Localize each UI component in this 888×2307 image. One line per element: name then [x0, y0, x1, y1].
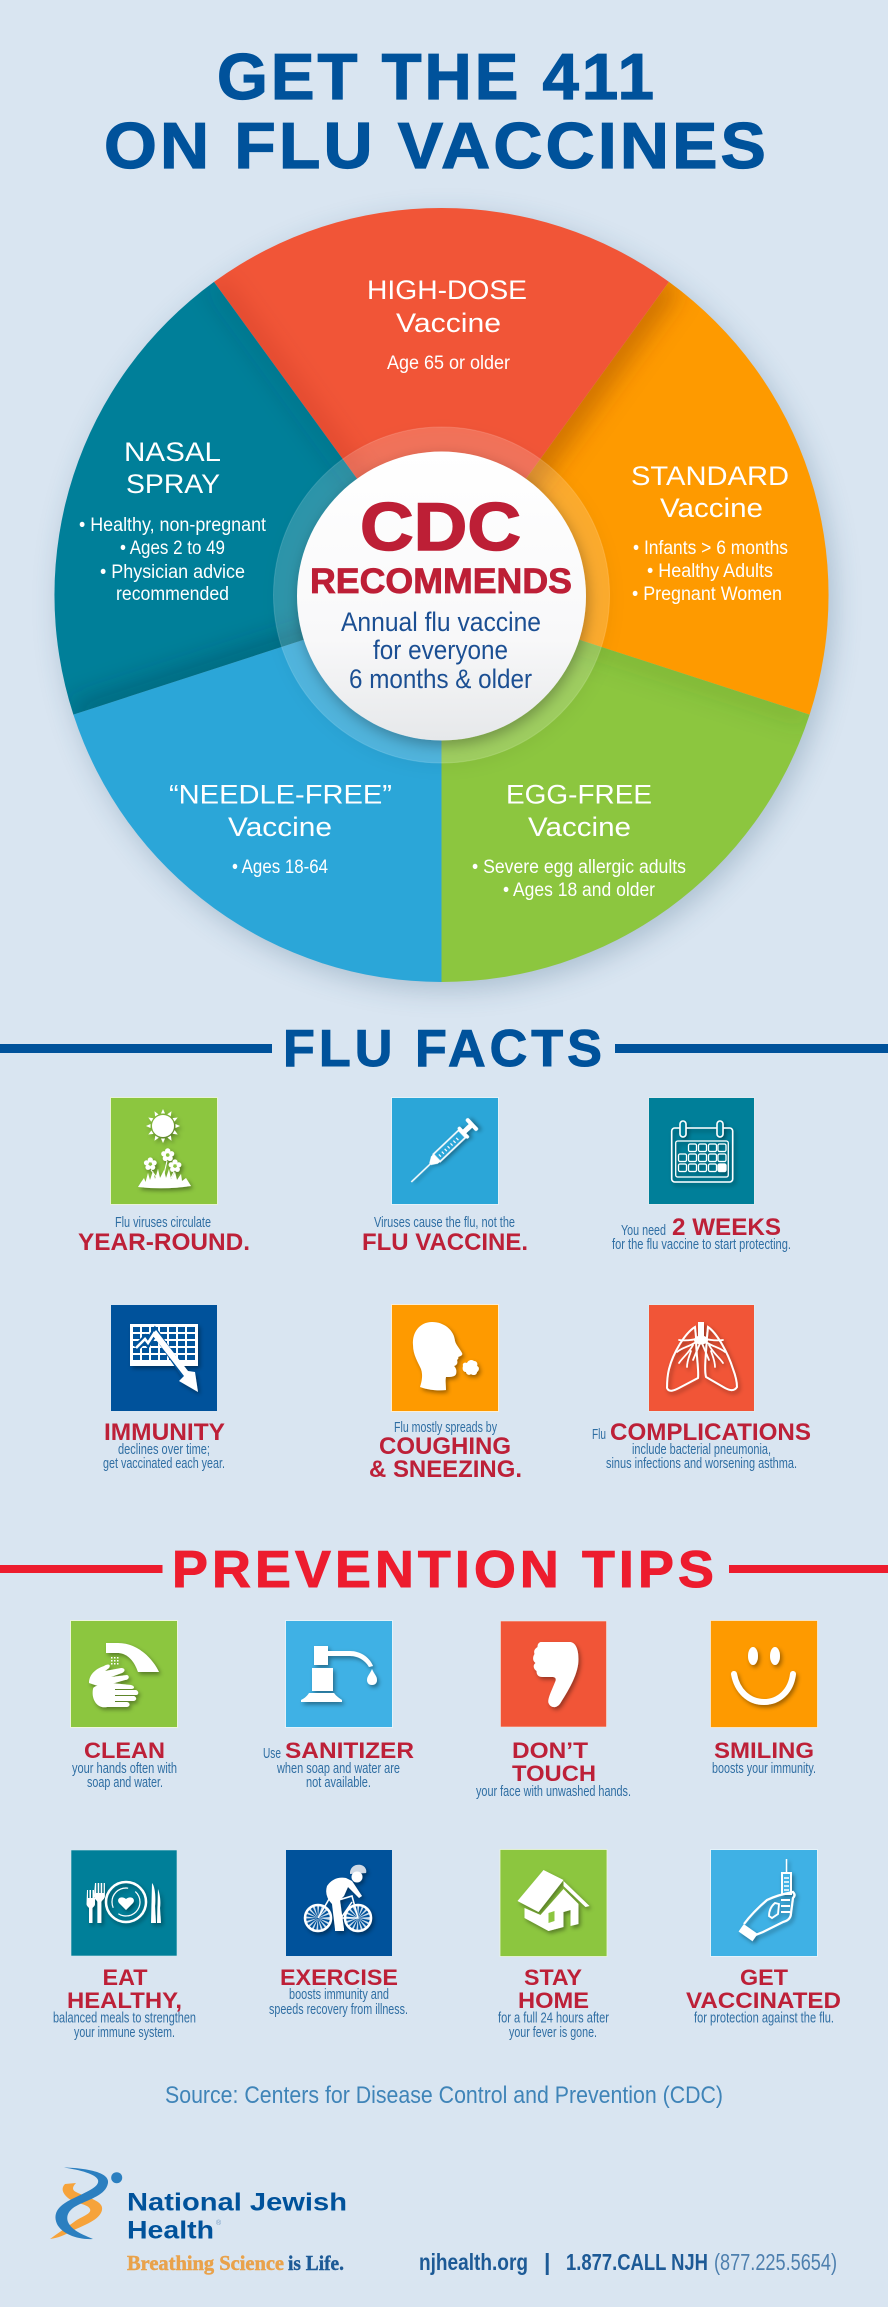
fact text: year-round — [78, 1215, 250, 1256]
segment: nasal spray — [54, 282, 357, 715]
tip text: don't touch: TOUCH — [512, 1761, 596, 1786]
segment: nasal spray: • Ages 2 to 49 — [120, 538, 225, 559]
tip text: clean: CLEAN — [84, 1738, 165, 1763]
heading: prevention tips — [0, 1541, 888, 1599]
tip text: clean: your hands often with — [72, 1761, 177, 1777]
tip text: sanitizer — [263, 1738, 414, 1791]
center circle: CDC recommends: CDC — [360, 489, 521, 565]
icon: sanitizer pump — [286, 1620, 392, 1728]
icon: thumbs down — [500, 1621, 606, 1727]
tip text: stay home: your fever is gone. — [509, 2025, 597, 2041]
icon: hand holding syringe — [710, 1850, 818, 1956]
heading: prevention tips: PREVENTION TIPS — [172, 1541, 718, 1599]
center circle: CDC recommends: RECOMMENDS — [310, 562, 572, 601]
tip text: sanitizer: SANITIZER — [285, 1738, 414, 1763]
tip text: stay home: HOME — [518, 1988, 589, 2013]
segment: nasal spray: SPRAY — [126, 469, 220, 499]
icon: sun and flowers — [110, 1098, 218, 1204]
logo: National Jewish Health: Breathing Science — [127, 2251, 284, 2275]
fact text: immunity: get vaccinated each year. — [103, 1456, 225, 1472]
segment: standard: • Infants > 6 months — [633, 538, 788, 559]
vaccine wheel chart — [54, 208, 834, 990]
fact text: coughing and sneezing: COUGHING — [379, 1433, 511, 1460]
segment: standard: Vaccine — [660, 493, 763, 523]
tip text: smiling: boosts your immunity. — [712, 1761, 816, 1777]
heading: flu facts — [0, 1020, 888, 1078]
center circle: CDC recommends: for everyone — [373, 635, 508, 665]
segment: high-dose: HIGH-DOSE — [367, 275, 527, 305]
tip text: sanitizer: Use — [263, 1746, 281, 1762]
fact text: year-round: Flu viruses circulate — [115, 1215, 211, 1231]
icon: sneezing head — [392, 1304, 498, 1412]
tip text: get vaccinated: GET — [740, 1965, 788, 1990]
fact text: 2 weeks — [612, 1214, 791, 1253]
tip text: eat healthy: EAT — [102, 1965, 148, 1990]
fact text: coughing and sneezing: & SNEEZING. — [369, 1456, 522, 1483]
tip text: smiling: SMILING — [714, 1738, 814, 1763]
logo: National Jewish Health: National Jewish — [127, 2188, 347, 2216]
icon: washing hands — [70, 1620, 178, 1728]
contact line: 1.877.CALL NJH — [566, 2249, 708, 2275]
icon: house — [500, 1850, 607, 1956]
icon: syringe — [392, 1098, 498, 1204]
fact text: complications: COMPLICATIONS — [610, 1419, 811, 1446]
tip text: get vaccinated: for protection against the flu. — [694, 2010, 834, 2026]
tip text: eat healthy: your immune system. — [74, 2025, 175, 2041]
title: GET THE 411 — [217, 40, 657, 113]
icon: declining chart — [111, 1305, 217, 1411]
segment: standard: STANDARD — [631, 461, 789, 491]
segment: nasal spray: NASAL — [124, 437, 221, 467]
tip text: exercise: EXERCISE — [280, 1965, 398, 1990]
title — [104, 40, 769, 182]
contact line: njhealth.org — [419, 2249, 528, 2275]
segment: high-dose — [214, 208, 669, 479]
fact text: flu vaccine: FLU VACCINE. — [362, 1229, 528, 1256]
segment: nasal spray: recommended — [116, 584, 229, 605]
segment: standard — [526, 282, 829, 715]
tip text: stay home: for a full 24 hours after — [498, 2010, 609, 2026]
tip text: stay home — [498, 1965, 609, 2041]
tip text: exercise: boosts immunity and — [289, 1987, 389, 2003]
tip text: clean: soap and water. — [87, 1775, 163, 1791]
segment: nasal spray: • Healthy, non-pregnant — [79, 515, 267, 536]
segment: high-dose: Vaccine — [396, 308, 501, 338]
center circle: CDC recommends — [297, 452, 586, 740]
title: ON FLU VACCINES — [104, 109, 769, 182]
fact text: immunity: IMMUNITY — [104, 1419, 225, 1446]
icon: plate and cutlery — [71, 1850, 177, 1956]
segment: needle-free — [73, 640, 442, 982]
tip text: eat healthy — [53, 1965, 196, 2041]
fact text: immunity — [103, 1419, 225, 1472]
fact text: complications: sinus infections and worsening asthma. — [606, 1456, 797, 1472]
tip text: clean — [72, 1738, 177, 1791]
segment: egg-free — [442, 640, 810, 982]
fact text: coughing and sneezing: Flu mostly spreads by — [394, 1420, 498, 1436]
fact text: 2 weeks: You need — [621, 1223, 666, 1239]
fact text: complications: include bacterial pneumonia, — [632, 1442, 771, 1458]
tip text: don't touch — [476, 1738, 631, 1800]
fact text: year-round: YEAR-ROUND. — [78, 1229, 250, 1256]
center circle: CDC recommends: 6 months & older — [349, 664, 532, 694]
segment: egg-free: Vaccine — [528, 812, 631, 842]
tip text: stay home: STAY — [524, 1965, 582, 1990]
segment: high-dose: Age 65 or older — [387, 353, 511, 374]
icon: cyclist — [286, 1850, 392, 1956]
segment: standard: • Pregnant Women — [632, 584, 782, 605]
tip text: eat healthy: balanced meals to strengthen — [53, 2010, 196, 2026]
heading: flu facts: FLU FACTS — [283, 1020, 606, 1078]
contact line: (877.225.5654) — [714, 2249, 837, 2275]
tip text: don't touch: your face with unwashed hands. — [476, 1784, 631, 1800]
tip text: sanitizer: not available. — [306, 1775, 371, 1791]
segment: needle-free: • Ages 18-64 — [232, 857, 328, 878]
tip text: sanitizer: when soap and water are — [276, 1761, 400, 1777]
contact line: | — [544, 2249, 550, 2275]
fact text: 2 weeks: 2 WEEKS — [672, 1214, 781, 1241]
segment: needle-free: “NEEDLE-FREE” — [169, 780, 392, 810]
icon: logo helix — [50, 2168, 122, 2239]
tip text: don't touch: DON’T — [512, 1738, 588, 1763]
logo: National Jewish Health: ® — [216, 2219, 222, 2227]
fact text: flu vaccine — [362, 1215, 528, 1256]
icon: calendar — [648, 1098, 754, 1204]
translucent ring — [274, 427, 610, 763]
tip text: exercise — [269, 1965, 408, 2018]
segment: needle-free: Vaccine — [228, 812, 332, 842]
source line: Source: Centers for Disease Control and Prevention (CDC) — [165, 2082, 723, 2109]
fact text: 2 weeks: for the flu vaccine to start protecting. — [612, 1237, 791, 1253]
contact line — [419, 2249, 837, 2275]
logo: National Jewish Health — [50, 2168, 347, 2275]
fact text: immunity: declines over time; — [118, 1442, 210, 1458]
segment: egg-free: EGG-FREE — [506, 780, 652, 810]
tip text: get vaccinated — [686, 1965, 841, 2026]
tip text: eat healthy: HEALTHY, — [67, 1988, 182, 2013]
segment: egg-free: • Ages 18 and older — [503, 880, 656, 901]
logo: National Jewish Health: is Life. — [288, 2251, 344, 2275]
logo: National Jewish Health: Health — [127, 2216, 214, 2244]
center circle: CDC recommends: Annual flu vaccine — [341, 607, 541, 637]
fact text: flu vaccine: Viruses cause the flu, not the — [374, 1215, 515, 1231]
tip text: smiling — [712, 1738, 816, 1777]
segment: nasal spray: • Physician advice — [100, 562, 245, 583]
fact text: complications — [592, 1419, 811, 1472]
tip text: get vaccinated: VACCINATED — [686, 1988, 841, 2013]
icon: smiley — [710, 1620, 818, 1728]
fact text: complications: Flu — [592, 1427, 606, 1443]
tip text: exercise: speeds recovery from illness. — [269, 2002, 408, 2018]
fact text: coughing and sneezing — [369, 1420, 522, 1483]
segment: standard: • Healthy Adults — [647, 561, 773, 582]
segment: egg-free: • Severe egg allergic adults — [472, 857, 686, 878]
icon: lungs — [648, 1304, 754, 1412]
